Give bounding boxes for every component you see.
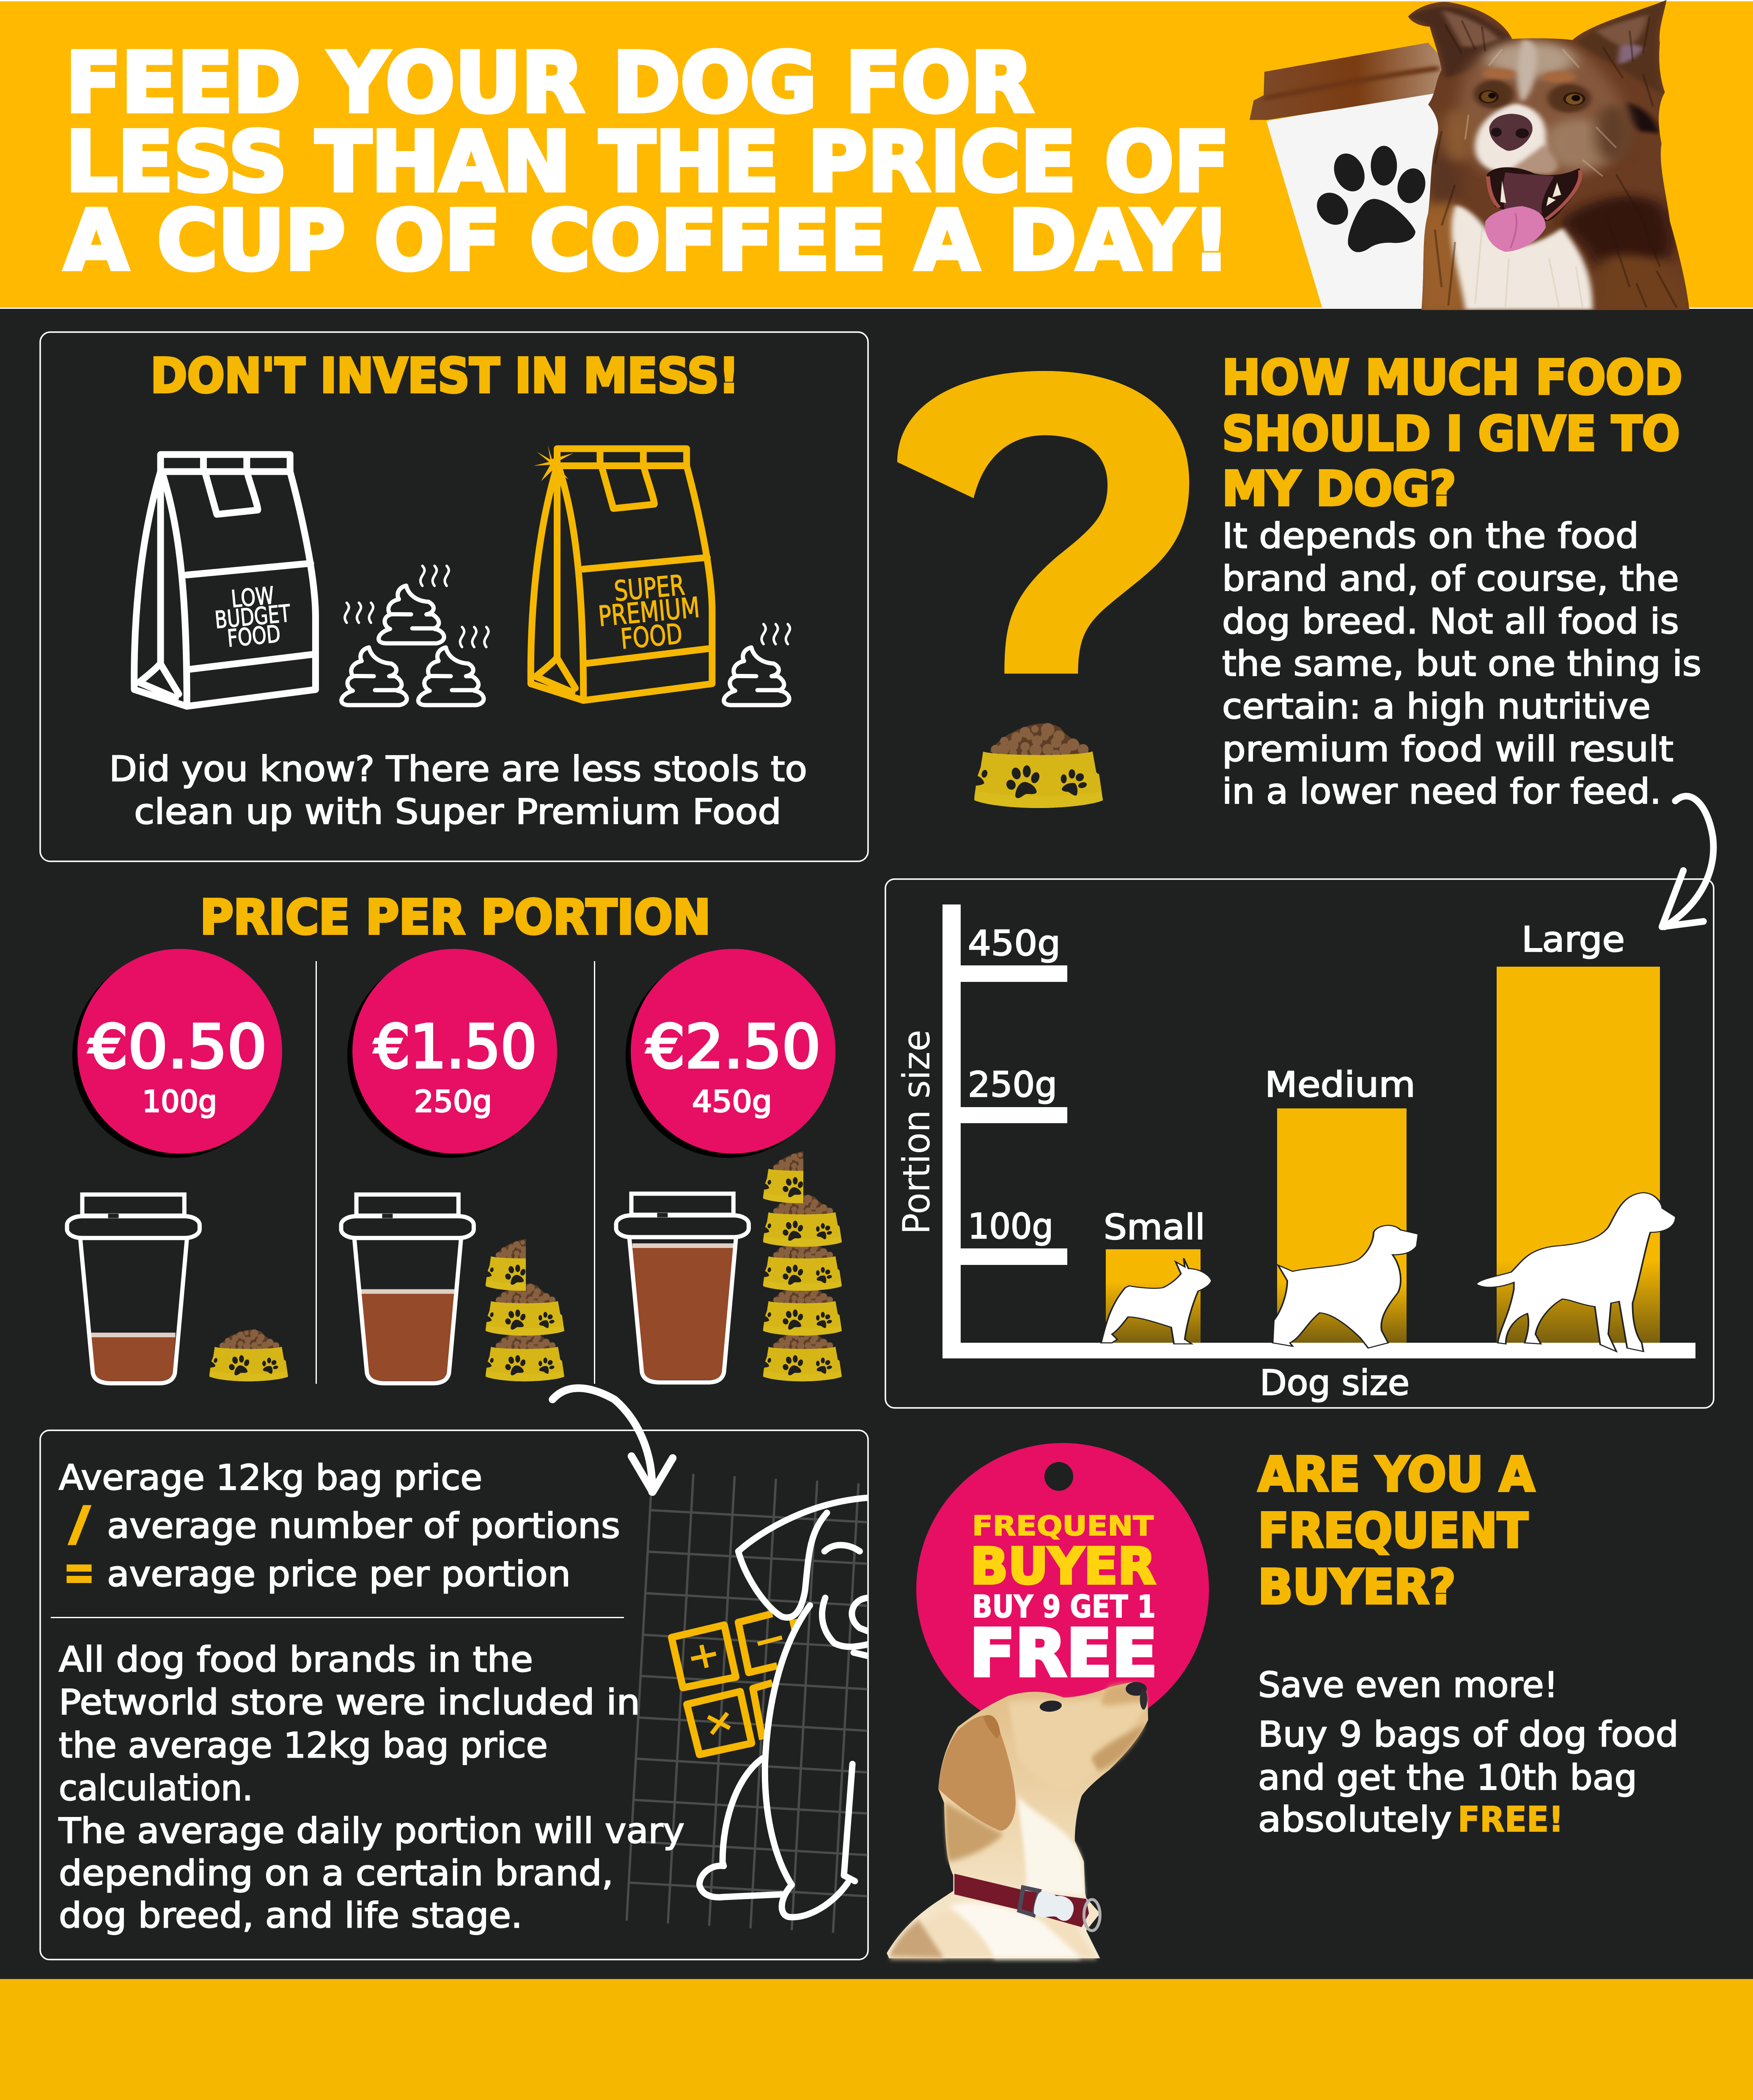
caption: did you know — [109, 749, 807, 832]
column divider — [316, 961, 317, 1384]
low budget food bag: LOW — [230, 582, 275, 613]
formula text: / — [69, 1497, 91, 1551]
dog silhouette small — [1101, 1258, 1212, 1344]
bar label small: Small — [1104, 1207, 1205, 1248]
formula text: = — [63, 1543, 95, 1602]
heading: how much food — [1222, 350, 1682, 517]
footer band — [0, 1979, 1753, 2100]
frequent buyer tag: BUYER — [970, 1537, 1156, 1595]
body text: food amount: dog breed. Not all food is — [1222, 602, 1679, 642]
heading: how much food: SHOULD I GIVE TO — [1222, 407, 1680, 462]
frequent buyer tag: FREE — [970, 1616, 1157, 1691]
bar label large: Large — [1522, 920, 1625, 960]
stack of bowls — [486, 1239, 564, 1381]
caption: did you know: Did you know? There are less stools to — [109, 749, 807, 789]
price badge 2.50 — [626, 949, 835, 1158]
heading: don't invest in mess: DON'T INVEST IN MESS! — [151, 349, 739, 404]
explanation text: Petworld store were included in — [59, 1682, 640, 1723]
heading: how much food: MY DOG? — [1222, 462, 1456, 517]
ruff and neck tones — [1415, 194, 1468, 314]
bar: large — [1497, 967, 1660, 1343]
body text: food amount: in a lower need for feed. — [1222, 772, 1661, 812]
arrow: bowls to calculation — [552, 1388, 673, 1492]
chart axes — [942, 904, 1695, 1358]
heading: are you a frequent buyer: BUYER? — [1258, 1560, 1456, 1615]
caption: did you know: clean up with Super Premium Food — [134, 792, 781, 832]
how much food text — [1222, 350, 1701, 812]
ears — [1408, 7, 1515, 78]
panel: don't invest in mess — [40, 332, 868, 861]
explanation text: calculation. — [59, 1768, 253, 1809]
super premium food bag — [531, 445, 712, 701]
body text: save even more: and get the 10th bag — [1258, 1758, 1637, 1798]
math symbols on keys — [691, 1638, 782, 1734]
explanation text: dog breed, and life stage. — [59, 1896, 522, 1936]
low budget food bag — [134, 454, 316, 706]
price column 3 — [616, 949, 842, 1383]
bar: small — [1106, 1249, 1201, 1343]
price column 2 — [341, 949, 564, 1383]
title: LESS THAN THE PRICE OF — [66, 114, 1230, 210]
bar: medium — [1277, 1108, 1407, 1343]
dog outline drawing — [699, 1498, 869, 1917]
formula text: average price per portion — [107, 1554, 571, 1594]
coffee cup with paw print — [1250, 43, 1445, 308]
price badge 1.50: 250g — [414, 1084, 492, 1119]
axis title portion size: Portion size — [895, 1030, 938, 1234]
dog silhouette medium — [1273, 1226, 1418, 1348]
body text: food amount: brand and, of course, the — [1222, 559, 1679, 599]
frequent buyer tag: BUY 9 GET 1 — [972, 1589, 1156, 1625]
tick label 450g: 450g — [968, 924, 1061, 964]
axis title dog size: Dog size — [1260, 1363, 1410, 1403]
notepad grid — [626, 1474, 868, 1933]
explanation text: All dog food brands in the — [59, 1640, 533, 1680]
arrow: text to chart — [1662, 796, 1713, 927]
heading: price per portion: PRICE PER PORTION — [200, 890, 711, 945]
price badge 0.50: 100g — [142, 1084, 217, 1119]
heading: are you a frequent buyer — [1258, 1447, 1535, 1615]
price badge 1.50: €1.50 — [374, 1012, 537, 1082]
explanation text: the average 12kg bag price — [59, 1726, 548, 1766]
price badge 1.50 — [347, 949, 557, 1158]
title: FEED YOUR DOG FOR — [66, 35, 1033, 131]
low budget food bag: BUDGET — [214, 600, 292, 634]
body text: save even more: FREE! — [1458, 1800, 1563, 1840]
coffee cup full — [616, 1194, 749, 1383]
tall stack of bowls — [763, 1151, 842, 1381]
heading: how much food: HOW MUCH FOOD — [1222, 350, 1682, 405]
body text: food amount: certain: a high nutritive — [1222, 687, 1651, 727]
price badge 2.50: 450g — [692, 1084, 772, 1119]
bar label medium: Medium — [1265, 1065, 1415, 1105]
icon: food bowl — [974, 723, 1103, 808]
dog silhouette large — [1476, 1193, 1676, 1352]
body text: food amount: It depends on the food — [1222, 516, 1639, 556]
body text: save even more: absolutely — [1258, 1800, 1452, 1840]
explanation text — [58, 1640, 684, 1936]
calculator keys — [671, 1613, 798, 1754]
panel: price calculation — [40, 1430, 869, 1960]
formula text: Average 12kg bag price — [59, 1458, 482, 1498]
icon: big question mark — [897, 371, 1189, 673]
title — [64, 35, 1230, 289]
header banner — [0, 0, 1753, 314]
super premium food bag: SUPER — [613, 569, 686, 608]
bowl — [209, 1329, 288, 1381]
price badge 2.50: €2.50 — [646, 1012, 821, 1082]
coffee cup half full — [341, 1195, 474, 1383]
tick label 250g: 250g — [968, 1065, 1057, 1105]
body text: food amount: premium food will result — [1222, 729, 1673, 770]
head — [1459, 39, 1627, 179]
explanation text: The average daily portion will vary — [58, 1811, 684, 1851]
heading: are you a frequent buyer: FREQUENT — [1258, 1504, 1528, 1559]
low budget food bag: FOOD — [226, 620, 282, 653]
body text: save even more — [1258, 1665, 1679, 1840]
tick label 100g: 100g — [968, 1207, 1053, 1247]
muzzle and face features — [1475, 104, 1546, 172]
frequent buyer tag — [916, 1443, 1209, 1736]
puppy photo — [887, 1682, 1148, 1958]
heading: are you a frequent buyer: ARE YOU A — [1258, 1447, 1535, 1502]
column divider — [594, 961, 595, 1384]
price badge 0.50: €0.50 — [88, 1012, 267, 1082]
super premium food bag: FOOD — [619, 617, 684, 656]
body text: food amount — [1222, 516, 1701, 812]
fur strokes — [1435, 16, 1676, 308]
one stool with steam — [724, 624, 790, 705]
explanation text: depending on a certain brand, — [59, 1853, 613, 1894]
border collie dog photo — [1408, 0, 1697, 314]
formula text — [59, 1458, 620, 1602]
body text: save even more: Buy 9 bags of dog food — [1258, 1715, 1679, 1755]
body text: save even more: Save even more! — [1258, 1665, 1558, 1705]
super premium food bag: PREMIUM — [597, 591, 701, 633]
coffee cup quarter full — [67, 1195, 200, 1383]
three stools with steam — [341, 566, 489, 705]
title: A CUP OF COFFEE A DAY! — [64, 192, 1230, 289]
price badge 0.50 — [72, 949, 282, 1158]
frequent buyer tag: FREQUENT — [972, 1511, 1154, 1542]
panel: portion chart — [885, 879, 1714, 1408]
body text: food amount: the same, but one thing is — [1222, 644, 1701, 684]
price column 1 — [67, 949, 288, 1383]
formula text: average number of portions — [107, 1506, 620, 1546]
